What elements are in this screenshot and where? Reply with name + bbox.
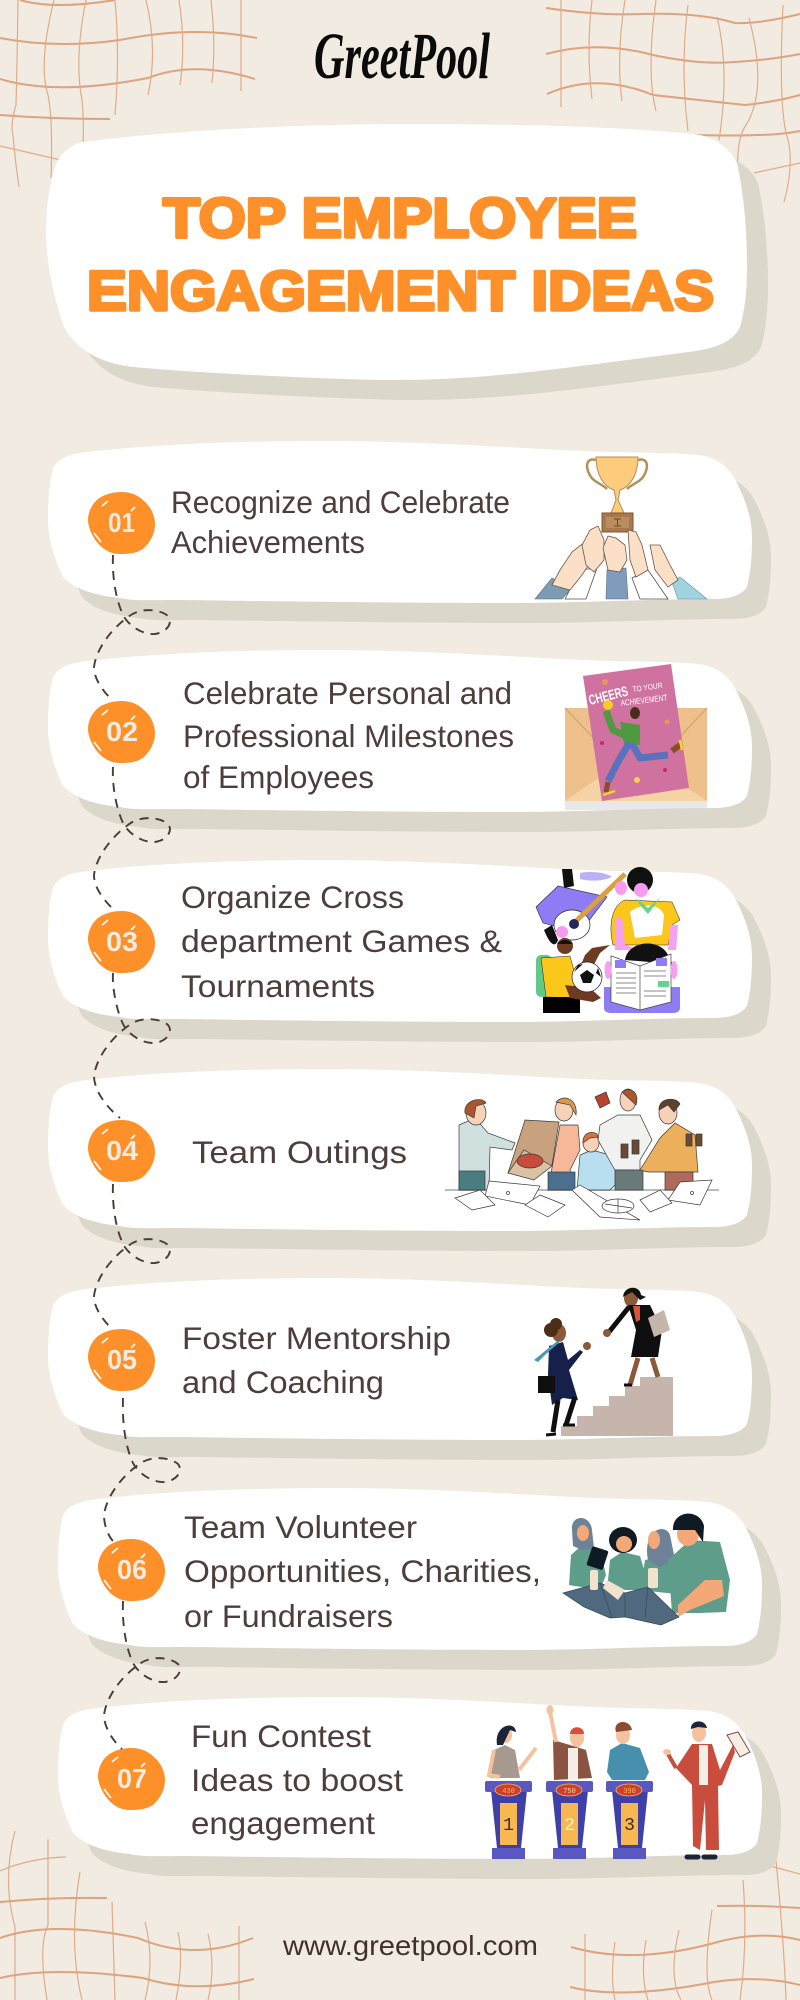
text: Fun Contest Ideas to boost engagement: Ideas to boost bbox=[191, 1762, 403, 1798]
text: Celebrate Personal and Professional Milestones of Employees: of Employees bbox=[183, 759, 374, 795]
icon: group with guitar, soccer ball and newspaper bbox=[536, 867, 680, 1013]
text: Foster Mentorship and Coaching: Foster Mentorship bbox=[182, 1320, 451, 1356]
panel: item 6 bbox=[58, 1488, 781, 1670]
icon: greeting card in envelope bbox=[565, 664, 707, 810]
icon: volunteers packing boxes bbox=[563, 1514, 730, 1625]
podium 3: 3 bbox=[624, 1816, 635, 1836]
badge 05 bbox=[88, 1329, 155, 1391]
footer website: www.greetpool.com bbox=[282, 1930, 538, 1961]
text: Organize Cross department Games & Tournaments: department Games & bbox=[181, 923, 502, 959]
panel: item 7 bbox=[58, 1697, 781, 1879]
text: Fun Contest Ideas to boost engagement bbox=[191, 1718, 403, 1841]
badge 04: 04 bbox=[106, 1135, 139, 1166]
dashed connector 4 to 5 bbox=[94, 1184, 170, 1329]
panel: item 2 bbox=[48, 650, 771, 832]
title bbox=[87, 186, 714, 322]
badge 06: 06 bbox=[117, 1554, 147, 1585]
dashed connector 1 to 2 bbox=[94, 555, 170, 700]
podium 1: 1 bbox=[503, 1816, 514, 1836]
badge 02: 02 bbox=[106, 716, 138, 747]
text: Team Volunteer Opportunities, Charities, or Fundraisers bbox=[184, 1509, 541, 1634]
decorative grid: top right bbox=[546, 0, 800, 202]
badge 06 bbox=[98, 1539, 165, 1601]
panel: item 5 bbox=[48, 1278, 771, 1460]
text: Foster Mentorship and Coaching bbox=[182, 1320, 451, 1400]
dashed connector 5 to 6 bbox=[104, 1398, 180, 1541]
text: Celebrate Personal and Professional Milestones of Employees: Professional Milestones bbox=[183, 718, 514, 754]
podium 3: 390 bbox=[623, 1788, 636, 1796]
decorative grid: bottom left bbox=[0, 1831, 254, 2000]
badge 03 bbox=[88, 911, 155, 973]
text: Fun Contest Ideas to boost engagement: Fun Contest bbox=[191, 1718, 371, 1754]
dashed connector 3 to 4 bbox=[94, 973, 170, 1118]
text: Recognize and Celebrate Achievements bbox=[171, 484, 510, 560]
dashed connector 2 to 3 bbox=[94, 767, 170, 908]
panel: item 3 bbox=[48, 860, 771, 1042]
badge 01: 01 bbox=[108, 507, 135, 538]
icon: greeting card in envelope: ACHIEVEMENT bbox=[620, 692, 668, 708]
text: Team Outings: Team Outings bbox=[192, 1134, 407, 1170]
decorative grid: top left bbox=[0, 0, 257, 187]
podium 1: 430 bbox=[502, 1788, 515, 1796]
decorative grid: bottom right bbox=[570, 1860, 800, 2000]
badge 01 bbox=[88, 492, 155, 554]
text: Organize Cross department Games & Tournaments bbox=[181, 879, 502, 1004]
podium 2: 750 bbox=[563, 1788, 576, 1796]
badge 04 bbox=[88, 1120, 155, 1182]
text: Fun Contest Ideas to boost engagement: engagement bbox=[191, 1805, 375, 1841]
podium 3 bbox=[606, 1781, 653, 1859]
text: Recognize and Celebrate Achievements: Recognize and Celebrate bbox=[171, 484, 510, 520]
text: Team Volunteer Opportunities, Charities, or Fundraisers: or Fundraisers bbox=[184, 1598, 393, 1634]
badge 07 bbox=[98, 1748, 165, 1810]
icon: trophy and raised hands bbox=[535, 457, 707, 599]
badge 02 bbox=[88, 701, 155, 763]
icon: greeting card in envelope: CHEERS bbox=[587, 683, 630, 708]
podium 2: 2 bbox=[564, 1816, 575, 1836]
icon: mentor helping on stairs bbox=[534, 1288, 673, 1436]
badge 05: 05 bbox=[107, 1344, 137, 1375]
title: TOP EMPLOYEE bbox=[163, 186, 637, 249]
badge 07: 07 bbox=[117, 1763, 147, 1794]
logo: GreetPool: GreetPool bbox=[314, 20, 490, 93]
icon: game show contestants and host bbox=[485, 1705, 750, 1859]
panel: item 4 bbox=[48, 1069, 771, 1251]
text: Organize Cross department Games & Tournaments: Tournaments bbox=[181, 968, 375, 1004]
text: Foster Mentorship and Coaching: and Coaching bbox=[182, 1364, 384, 1400]
text: Celebrate Personal and Professional Milestones of Employees: Celebrate Personal and bbox=[183, 675, 512, 711]
text: Team Volunteer Opportunities, Charities, or Fundraisers: Opportunities, Charities, bbox=[184, 1553, 541, 1589]
icon: team sharing pizza bbox=[445, 1089, 719, 1220]
podium 2 bbox=[546, 1781, 593, 1859]
badge 03: 03 bbox=[106, 926, 138, 957]
panel: hero title card bbox=[46, 124, 768, 400]
text: Recognize and Celebrate Achievements: Achievements bbox=[171, 524, 365, 560]
podium 1 bbox=[485, 1781, 532, 1859]
text: Team Volunteer Opportunities, Charities, or Fundraisers: Team Volunteer bbox=[184, 1509, 417, 1545]
title: ENGAGEMENT IDEAS bbox=[87, 259, 714, 322]
dashed connector 6 to 7 bbox=[104, 1601, 180, 1749]
panel: item 1 bbox=[48, 441, 771, 623]
icon: greeting card in envelope: TO YOUR bbox=[632, 681, 663, 694]
text: Celebrate Personal and Professional Milestones of Employees bbox=[183, 675, 514, 795]
text: Organize Cross department Games & Tournaments: Organize Cross bbox=[181, 879, 404, 915]
